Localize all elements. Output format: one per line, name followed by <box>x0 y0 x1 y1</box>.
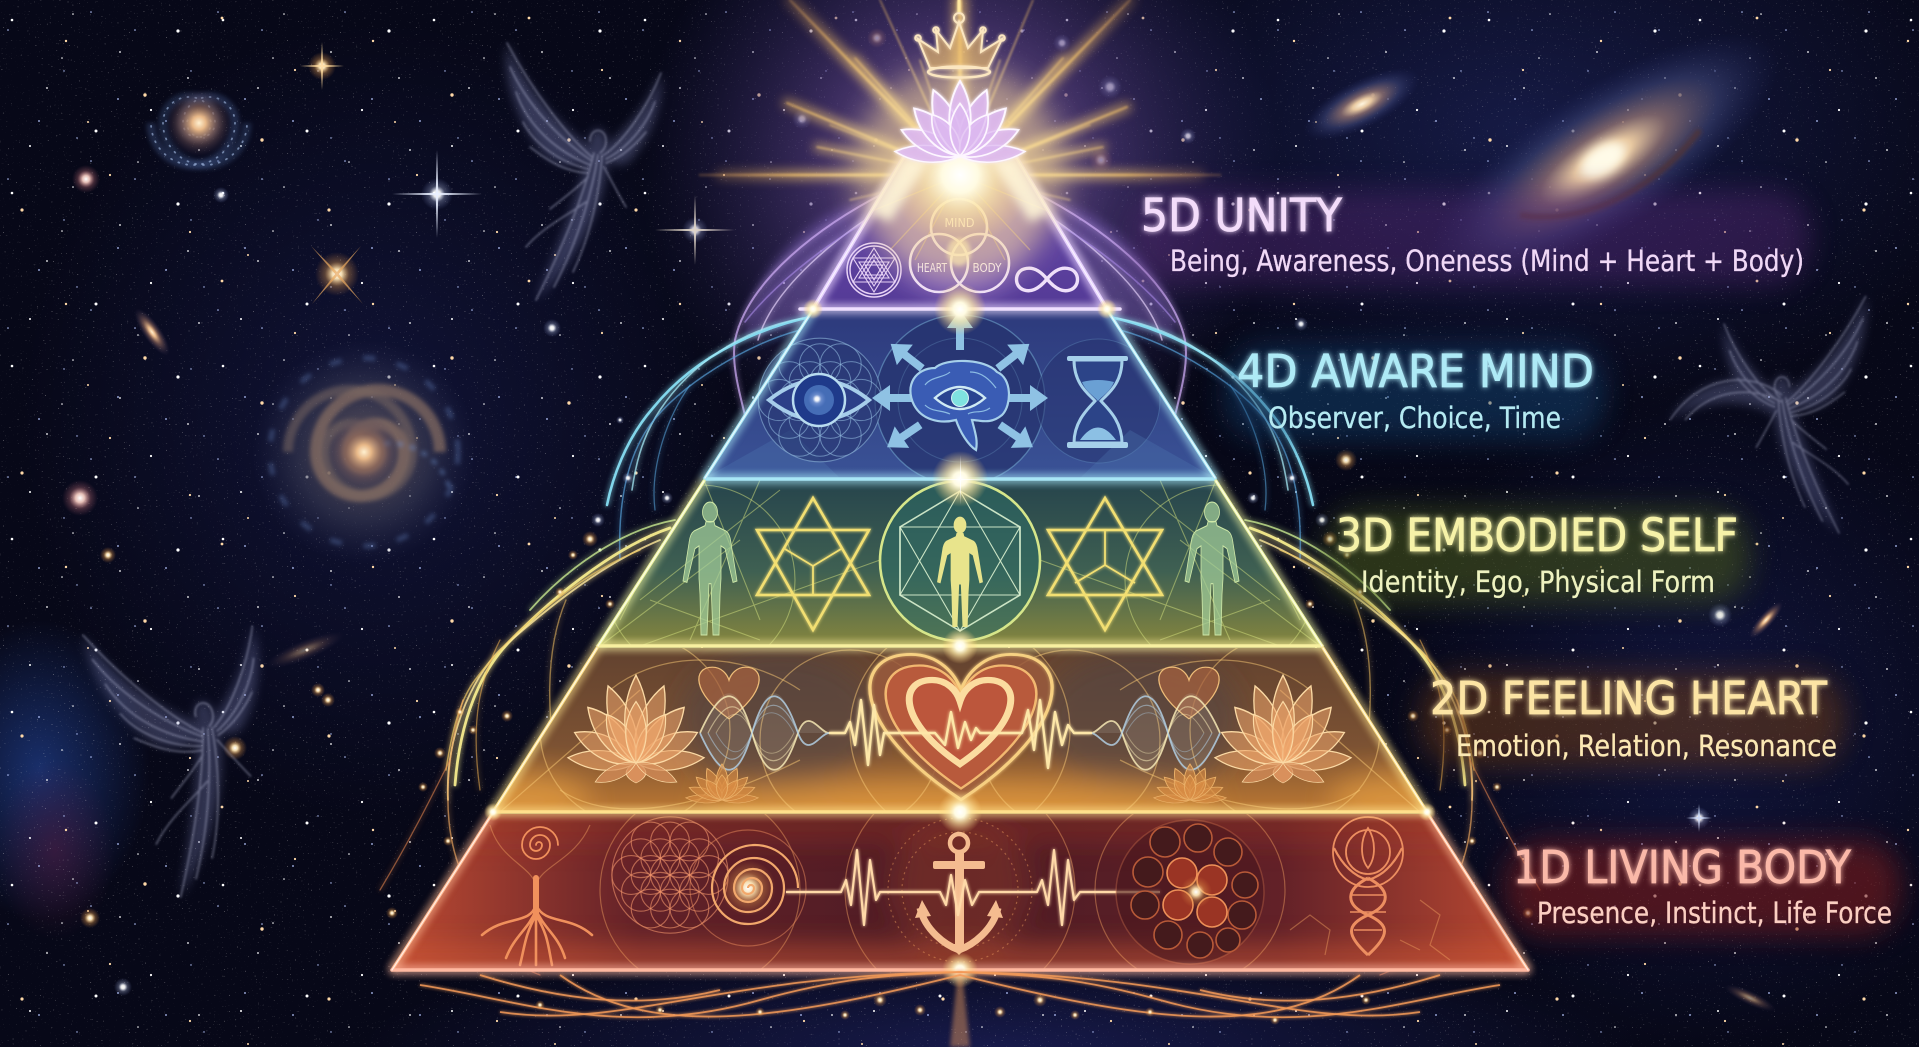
icon: lotus left <box>567 675 705 788</box>
icon: golden spiral <box>690 830 806 946</box>
heading 3D: 3D EMBODIED SELF <box>1336 509 1738 562</box>
flowing energy lines <box>380 190 1540 975</box>
tier 3D: embodied self panel <box>598 480 1322 675</box>
crown <box>915 0 1005 78</box>
label: 3D embodied self <box>1325 508 1750 603</box>
icon: small heart right <box>1159 667 1219 719</box>
label: 2D feeling heart <box>1420 672 1845 767</box>
glowing sparks on energy lines <box>386 416 1534 919</box>
icon: brain with eye <box>910 361 1009 450</box>
icon: small heart left <box>699 667 759 719</box>
icon: central heart <box>870 654 1052 800</box>
tier 4D: aware mind panel <box>705 310 1215 485</box>
tier 5D: unity panel <box>820 168 1100 308</box>
energy dome behind upper tiers <box>742 190 1178 340</box>
icon: sri yantra <box>847 243 901 297</box>
icon: flower of life with eye <box>758 338 882 462</box>
pyramid outline and tier dividers <box>392 155 1528 970</box>
icon: resonance waves right <box>1091 693 1220 773</box>
icon: cell cluster <box>1116 820 1264 964</box>
icon: pulse line <box>786 850 1160 925</box>
icon: body silhouette right <box>1185 502 1239 635</box>
tier 2D: feeling heart panel <box>496 648 1424 810</box>
icon: central figure in sphere <box>880 481 1040 641</box>
description 4D: Observer, Choice, Time <box>1268 401 1561 435</box>
icon: small lotus right <box>1153 764 1227 804</box>
description 3D: Identity, Ego, Physical Form <box>1361 565 1715 599</box>
apex core burst <box>855 67 1065 277</box>
apex glow <box>640 0 1280 485</box>
heading 5D: 5D UNITY <box>1141 189 1342 242</box>
icon: mind heart body venn circles: BODY <box>972 260 1002 275</box>
icon: resonance waves left <box>700 693 829 773</box>
angel figure: upper left <box>506 43 661 300</box>
description 5D: Being, Awareness, Oneness (Mind + Heart + Body) <box>1170 244 1804 278</box>
icon: heartbeat line <box>829 700 1092 768</box>
icon: anchor <box>915 834 1003 955</box>
galaxy: faint lower left <box>262 625 348 675</box>
label: 1D living body <box>1505 840 1900 935</box>
light rays <box>700 0 1220 200</box>
icon: arrows around brain <box>872 310 1048 458</box>
crown lotus <box>895 81 1025 165</box>
heading 2D: 2D FEELING HEART <box>1430 672 1827 725</box>
icon: lotus right <box>1214 675 1352 788</box>
galaxy: small top right <box>1294 54 1430 154</box>
icon: mind heart body venn circles: HEART <box>917 260 947 275</box>
galaxy: small tilted left <box>129 304 175 360</box>
galaxy: small lower right <box>1745 597 1787 643</box>
icon: caduceus <box>1333 817 1403 955</box>
heading 4D: 4D AWARE MIND <box>1237 345 1594 398</box>
icon: hourglass <box>1067 356 1128 448</box>
galaxy: faint bottom right <box>1722 980 1778 1016</box>
angel figure: lower left <box>83 595 312 905</box>
description 2D: Emotion, Relation, Resonance <box>1456 729 1837 763</box>
angel figure: right <box>1670 297 1866 533</box>
galaxy: large top right <box>1392 0 1814 332</box>
energy waves and sparks under pyramid <box>420 970 1500 1047</box>
tier 1D: living body panel <box>392 775 1528 1005</box>
icon: small lotus left <box>685 764 759 804</box>
galaxy: spiral left centre <box>252 340 476 564</box>
divider glow nodes <box>484 283 1436 988</box>
icon: body silhouette left <box>683 502 737 635</box>
galaxy: blue spiral top left <box>151 89 247 165</box>
icon: merkaba left <box>757 498 869 630</box>
label: 5D unity <box>1130 189 1810 285</box>
icon: mind heart body venn circles: MIND <box>944 215 974 230</box>
icon: flower of life <box>612 817 728 933</box>
icon: tree of life <box>482 827 592 965</box>
icon: mind heart body venn circles <box>910 199 1009 292</box>
icon: infinity <box>1016 268 1078 291</box>
sacred geometry lines <box>602 480 1318 644</box>
heading 1D: 1D LIVING BODY <box>1513 841 1851 894</box>
label: 4D aware mind <box>1225 345 1605 440</box>
icon: merkaba right <box>1048 498 1162 630</box>
